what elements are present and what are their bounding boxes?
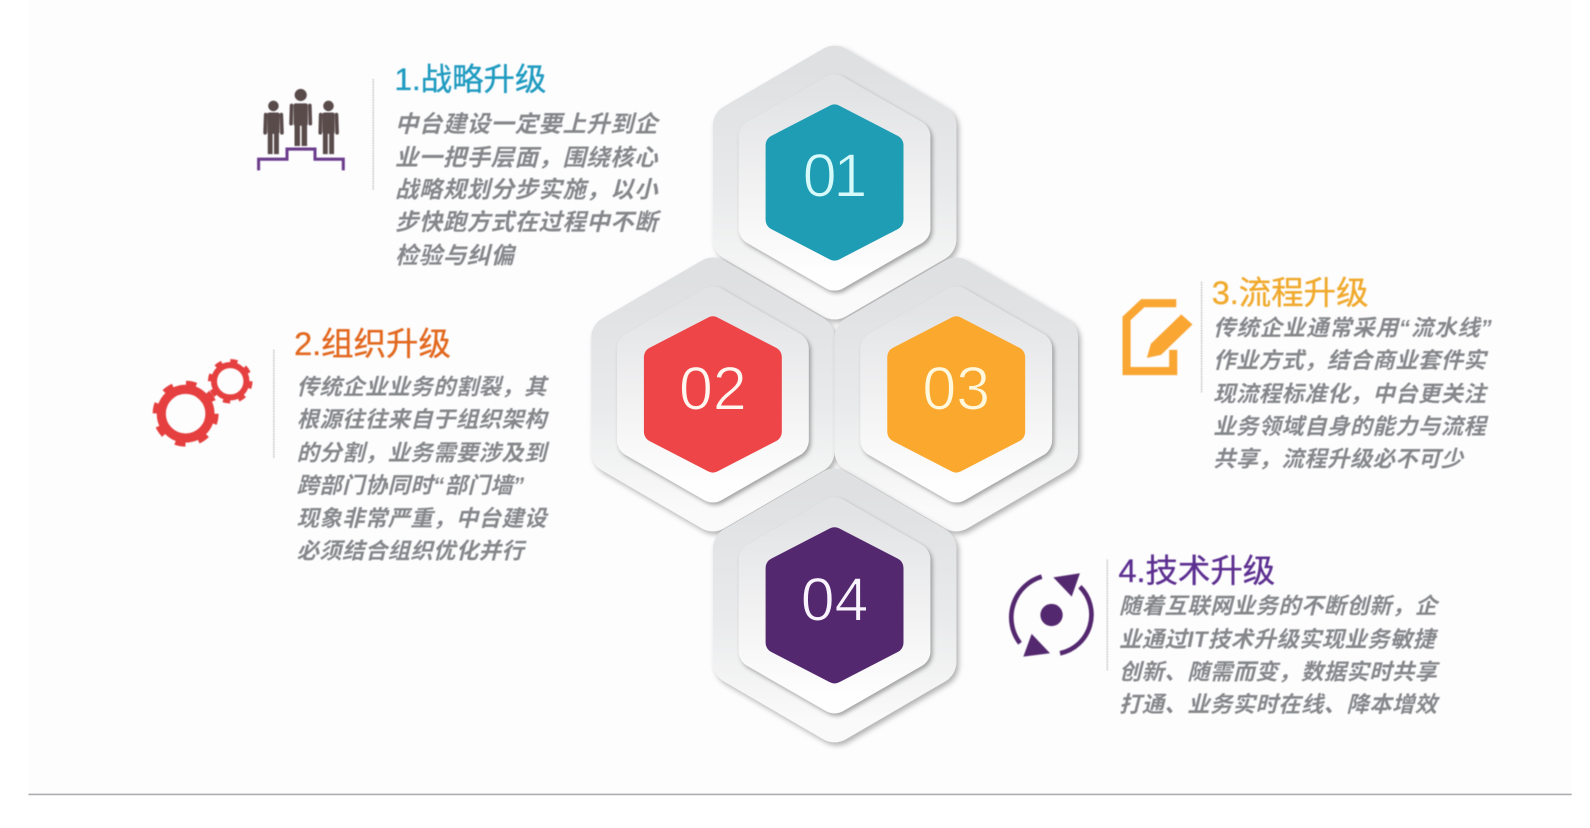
hexagon 02 — [614, 280, 812, 509]
divider — [372, 79, 374, 191]
icon: cycle arrows — [1011, 573, 1091, 657]
hexagon 01: 01 — [803, 142, 865, 210]
body text: 的分割，业务需要涉及到 — [297, 440, 550, 465]
icon: gears — [156, 361, 250, 443]
body text: 必须结合组织优化并行 — [297, 539, 527, 564]
body text: 作业方式，结合商业套件实 — [1213, 348, 1489, 373]
body text: 跨部门协同时“部门墙” — [297, 473, 525, 498]
hexagon 03: 03 — [922, 355, 990, 423]
body text: 传统企业通常采用“流水线” — [1213, 316, 1493, 341]
divider — [1201, 282, 1203, 393]
hexagon 04: 04 — [801, 566, 868, 634]
body text: 传统企业业务的割裂，其 — [297, 374, 549, 399]
divider — [1106, 560, 1108, 671]
body text: 战略规划分步实施，以小 — [395, 177, 659, 203]
body text: 业务领域自身的能力与流程 — [1213, 414, 1490, 439]
icon: document with pencil — [1127, 303, 1192, 371]
body text: 共享，流程升级必不可少 — [1213, 446, 1465, 471]
bottom rule — [28, 793, 1572, 795]
body text: 检验与纠偏 — [395, 243, 517, 269]
body text: 根源往往来自于组织架构 — [297, 407, 549, 432]
icon: people on podium — [259, 89, 343, 170]
hexagon 04 — [735, 491, 934, 720]
divider — [273, 350, 275, 458]
body text: 创新、随需而变，数据实时共享 — [1119, 659, 1441, 684]
panel: organization upgrade — [156, 326, 550, 564]
hexagon 02: 02 — [679, 355, 747, 423]
body text — [297, 374, 550, 564]
body text — [1119, 593, 1441, 717]
body text: 业通过IT技术升级实现业务敏捷 — [1119, 627, 1439, 652]
heading: 1.战略升级 — [394, 62, 546, 97]
panel: process upgrade — [1127, 275, 1493, 471]
body text: 中台建设一定要上升到企 — [395, 111, 660, 137]
panel: technology upgrade — [1011, 553, 1441, 717]
heading: 2.组织升级 — [294, 326, 451, 362]
body text — [395, 111, 662, 269]
body text: 打通、业务实时在线、降本增效 — [1119, 692, 1441, 717]
heading: 3.流程升级 — [1212, 275, 1369, 311]
body text: 随着互联网业务的不断创新，企 — [1119, 593, 1440, 618]
body text — [1213, 316, 1493, 471]
heading: 4.技术升级 — [1118, 553, 1275, 589]
body text: 现象非常严重，中台建设 — [297, 506, 549, 531]
hexagon 01 — [735, 68, 934, 297]
body text: 现流程标准化，中台更关注 — [1213, 382, 1489, 407]
body text: 步快跑方式在过程中不断 — [395, 209, 662, 235]
hexagon 03 — [857, 280, 1056, 509]
body text: 业一把手层面，围绕核心 — [395, 144, 658, 170]
panel: strategy upgrade — [259, 62, 662, 269]
